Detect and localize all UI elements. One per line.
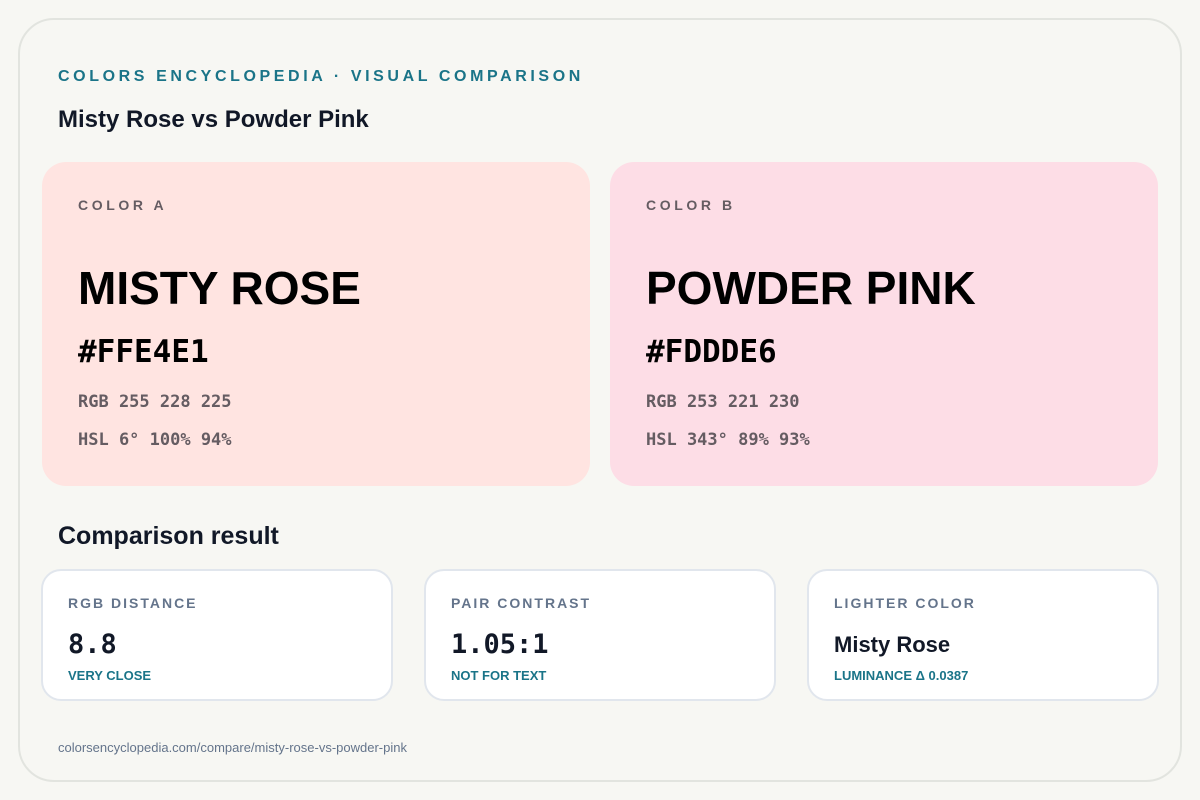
card value: 8.8 xyxy=(68,629,117,660)
title: Misty Rose vs Powder Pink xyxy=(58,106,369,133)
hsl A: HSL 6° 100% 94% xyxy=(78,430,232,450)
card note: VERY CLOSE xyxy=(68,668,151,683)
section heading: Comparison result xyxy=(58,522,279,550)
card value: Misty Rose xyxy=(834,632,950,657)
hex B: #FDDDE6 xyxy=(646,334,777,370)
label: color A: COLOR A xyxy=(78,197,167,213)
card label: LIGHTER COLOR xyxy=(834,595,976,611)
hex A: #FFE4E1 xyxy=(78,334,209,370)
label: color B: COLOR B xyxy=(646,197,736,213)
panel: color A xyxy=(42,162,590,486)
rgb A: RGB 255 228 225 xyxy=(78,392,232,412)
rgb B: RGB 253 221 230 xyxy=(646,392,800,412)
card note: NOT FOR TEXT xyxy=(451,668,546,683)
color name B: POWDER PINK xyxy=(646,262,976,314)
card label: PAIR CONTRAST xyxy=(451,595,591,611)
card value: 1.05:1 xyxy=(451,629,549,660)
card: lighter color xyxy=(807,569,1159,701)
card note: LUMINANCE Δ 0.0387 xyxy=(834,668,968,683)
card: RGB distance xyxy=(41,569,393,701)
panel: color B xyxy=(610,162,1158,486)
footer url: colorsencyclopedia.com/compare/misty-rose-vs-powder-pink xyxy=(58,740,407,755)
color name A: MISTY ROSE xyxy=(78,262,361,314)
card label: RGB DISTANCE xyxy=(68,595,198,611)
card: pair contrast xyxy=(424,569,776,701)
hsl B: HSL 343° 89% 93% xyxy=(646,430,810,450)
eyebrow heading: COLORS ENCYCLOPEDIA · VISUAL COMPARISON xyxy=(58,68,584,85)
